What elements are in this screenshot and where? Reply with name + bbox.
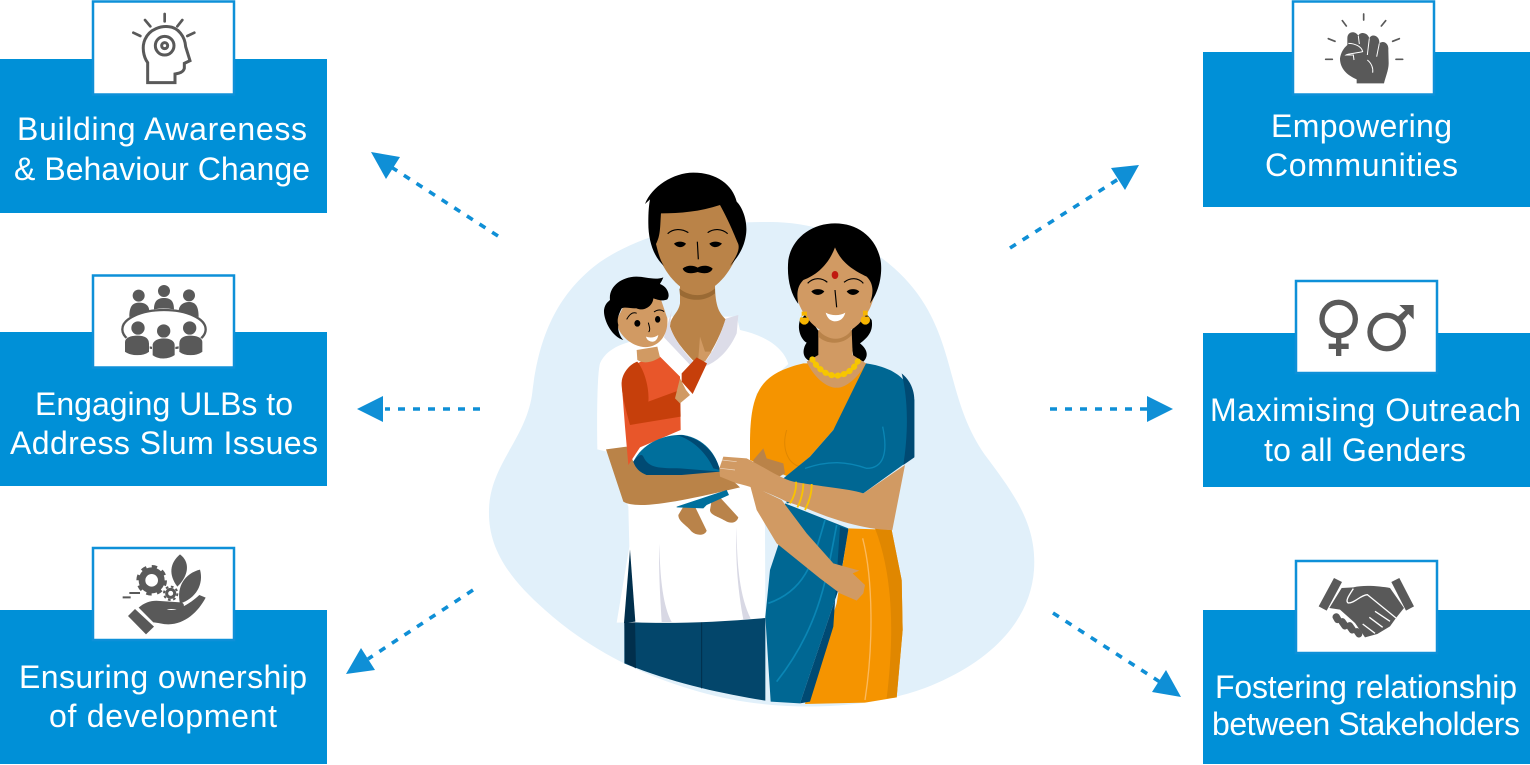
panel: Empowering Communities bbox=[1203, 2, 1530, 207]
label text bbox=[10, 386, 318, 461]
woman: hair and braids bbox=[799, 310, 872, 362]
man: neck and chest bbox=[670, 283, 726, 367]
icon: raised fist bbox=[1293, 2, 1434, 94]
arrow: to Empowering Communities bbox=[1010, 165, 1139, 248]
panel: Building Awareness bbox=[0, 2, 327, 213]
label text: to all Genders bbox=[1264, 432, 1466, 468]
label text: Engaging ULBs to bbox=[35, 386, 293, 422]
label text bbox=[1210, 392, 1521, 468]
man: head bbox=[655, 203, 740, 294]
icon: meeting table bbox=[93, 276, 234, 368]
arrow: to Ensuring ownership bbox=[346, 590, 473, 674]
woman: earrings bbox=[800, 311, 870, 325]
man: trousers bbox=[624, 617, 765, 701]
child: orange shirt bbox=[622, 357, 681, 465]
label text: & Behaviour Change bbox=[14, 151, 310, 187]
woman: blue upper saree bbox=[783, 363, 914, 503]
label text: Address Slum Issues bbox=[10, 425, 318, 461]
family figures bbox=[597, 173, 914, 704]
panel: Ensuring ownership bbox=[0, 548, 327, 764]
man: white shirt bbox=[597, 317, 788, 623]
woman: necklace bbox=[812, 359, 859, 376]
illustration: family on pale blue blob bbox=[489, 173, 1034, 707]
label text bbox=[1212, 669, 1520, 742]
arrow: to Building Awareness bbox=[371, 152, 498, 236]
label text: Communities bbox=[1265, 147, 1458, 183]
label text: Building Awareness bbox=[17, 111, 307, 147]
woman: bangles bbox=[790, 482, 812, 510]
child: trousers and feet bbox=[633, 435, 720, 475]
arrow: to Fostering relationship bbox=[1053, 613, 1181, 697]
label text: Fostering relationship bbox=[1215, 669, 1517, 705]
label text: Maximising Outreach bbox=[1210, 392, 1521, 428]
man: second hand bbox=[753, 448, 785, 480]
arrow: to Maximising Outreach bbox=[1050, 396, 1173, 422]
child: head bbox=[637, 347, 660, 362]
arrow: to Engaging ULBs bbox=[357, 396, 480, 422]
label text bbox=[1265, 108, 1458, 183]
man: arm holding child bbox=[606, 447, 740, 505]
man: collar bbox=[664, 310, 738, 368]
woman: head bbox=[796, 242, 875, 335]
label text: Empowering bbox=[1271, 108, 1452, 144]
panel: Maximising Outreach bbox=[1203, 281, 1530, 487]
label text: between Stakeholders bbox=[1212, 706, 1520, 742]
woman: blouse bbox=[750, 363, 867, 476]
label text: of development bbox=[49, 698, 277, 734]
icon: gender symbols bbox=[1296, 281, 1437, 373]
icon: handshake bbox=[1296, 561, 1437, 653]
icon: head with target bbox=[93, 2, 234, 94]
panel: Fostering relationship bbox=[1203, 561, 1530, 764]
woman: arm around belly bbox=[750, 485, 865, 601]
icon: hand with gears and leaves bbox=[93, 548, 234, 640]
woman: arm reaching to man bbox=[719, 457, 905, 530]
child: hands bbox=[675, 337, 712, 403]
label text bbox=[19, 659, 307, 734]
woman: neck bbox=[807, 330, 866, 388]
man: shirt slit bbox=[624, 549, 635, 623]
background blob bbox=[489, 222, 1034, 707]
label text bbox=[14, 111, 310, 187]
woman: lower saree bbox=[765, 503, 848, 703]
label text: Ensuring ownership bbox=[19, 659, 307, 695]
panel: Engaging ULBs bbox=[0, 276, 327, 486]
